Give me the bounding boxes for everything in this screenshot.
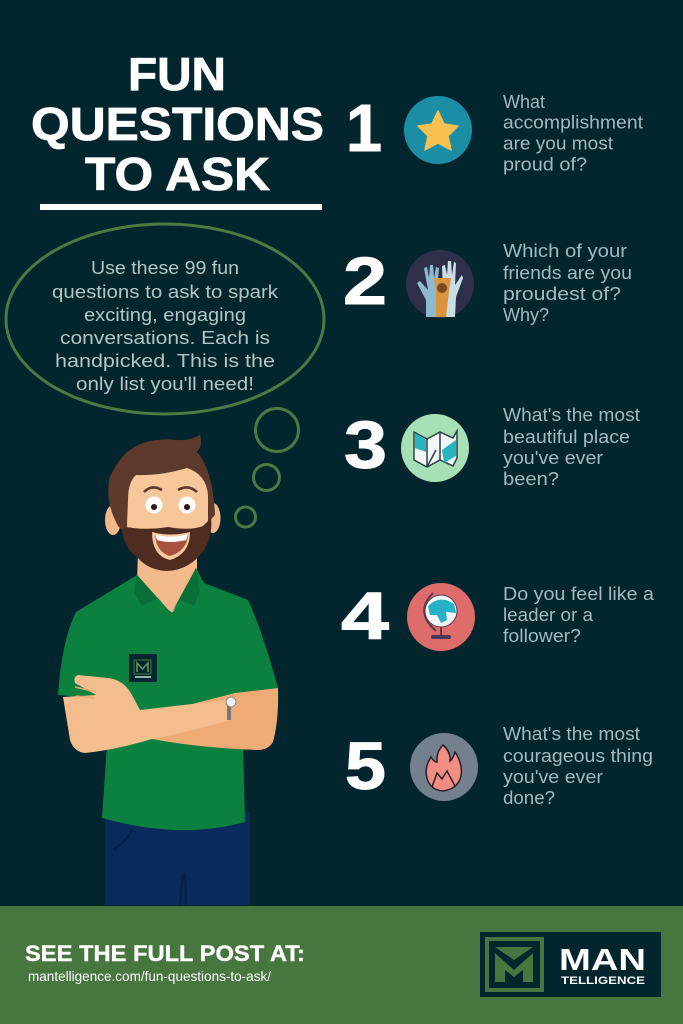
icon: raised hands	[406, 250, 474, 318]
right forearm and elbow	[130, 688, 278, 750]
question 4: leader or a	[503, 605, 594, 625]
eyes	[144, 487, 197, 514]
mouth	[152, 532, 190, 560]
logo: TELLIGENCE	[561, 975, 645, 987]
question 2	[503, 241, 632, 325]
item 1	[346, 91, 643, 174]
item 2	[343, 241, 632, 325]
question 4: follower?	[503, 626, 581, 646]
question 4	[503, 584, 655, 646]
footer call to action: mantelligence.com/fun-questions-to-ask/	[28, 968, 271, 984]
thought bubble with intro text: conversations. Each is	[60, 328, 270, 348]
collar	[134, 568, 200, 612]
thought bubble with intro text	[6, 224, 324, 414]
question 2: proudest of?	[503, 284, 621, 304]
icon: star	[404, 96, 472, 164]
question 1: are you most	[503, 134, 613, 154]
watch	[226, 697, 236, 720]
footer call to action	[25, 941, 305, 984]
title	[31, 48, 324, 210]
item 4	[341, 579, 655, 654]
thought bubbles	[236, 408, 298, 527]
question 5: courageous thing	[503, 746, 653, 766]
question 1: accomplishment	[503, 112, 643, 132]
icon: map	[401, 414, 469, 482]
thought bubble with intro text: handpicked. This is the	[55, 351, 275, 371]
question 3	[503, 405, 640, 489]
question 5: you've ever	[503, 767, 603, 787]
pants	[105, 812, 250, 905]
question 1: What	[503, 92, 545, 112]
question 3: been?	[503, 469, 559, 489]
question 5: done?	[503, 788, 555, 808]
question 2: Why?	[503, 305, 549, 325]
number 1: 1	[346, 91, 382, 166]
hair	[108, 435, 215, 530]
question 3: beautiful place	[503, 427, 630, 447]
ears	[105, 503, 220, 535]
icon: flame	[410, 733, 478, 801]
number 4: 4	[341, 579, 389, 654]
beard	[122, 518, 211, 571]
logo	[480, 932, 661, 997]
thought bubble with intro text: only list you'll need!	[76, 374, 254, 394]
number 2: 2	[343, 244, 387, 319]
item 5	[345, 724, 653, 808]
question 4: Do you feel like a	[503, 584, 655, 604]
question 1: proud of?	[503, 154, 587, 174]
title: TO ASK	[85, 148, 270, 200]
neck	[137, 550, 197, 613]
question 5: What's the most	[503, 724, 640, 744]
shirt	[58, 568, 278, 830]
footer band	[0, 906, 683, 1024]
title: FUN	[128, 48, 226, 100]
number 3: 3	[344, 408, 387, 483]
item 3	[344, 405, 640, 489]
question 2: Which of your	[503, 241, 627, 261]
question 5	[503, 724, 653, 808]
character: man with crossed arms	[58, 435, 278, 905]
question 3: What's the most	[503, 405, 640, 425]
number 5: 5	[345, 729, 386, 804]
shirt badge	[129, 654, 157, 682]
title: QUESTIONS	[31, 98, 324, 150]
thought bubble with intro text: Use these 99 fun	[91, 258, 239, 278]
left arm and hand	[63, 675, 230, 753]
face	[127, 468, 208, 568]
icon: globe	[407, 583, 475, 651]
thought bubble with intro text: exciting, engaging	[84, 305, 246, 325]
logo: MAN	[559, 942, 646, 977]
question 1	[503, 92, 643, 174]
question 3: you've ever	[503, 448, 603, 468]
question 2: friends are you	[503, 263, 632, 283]
thought bubble with intro text: questions to ask to spark	[52, 282, 279, 302]
footer call to action: SEE THE FULL POST AT:	[25, 941, 305, 966]
